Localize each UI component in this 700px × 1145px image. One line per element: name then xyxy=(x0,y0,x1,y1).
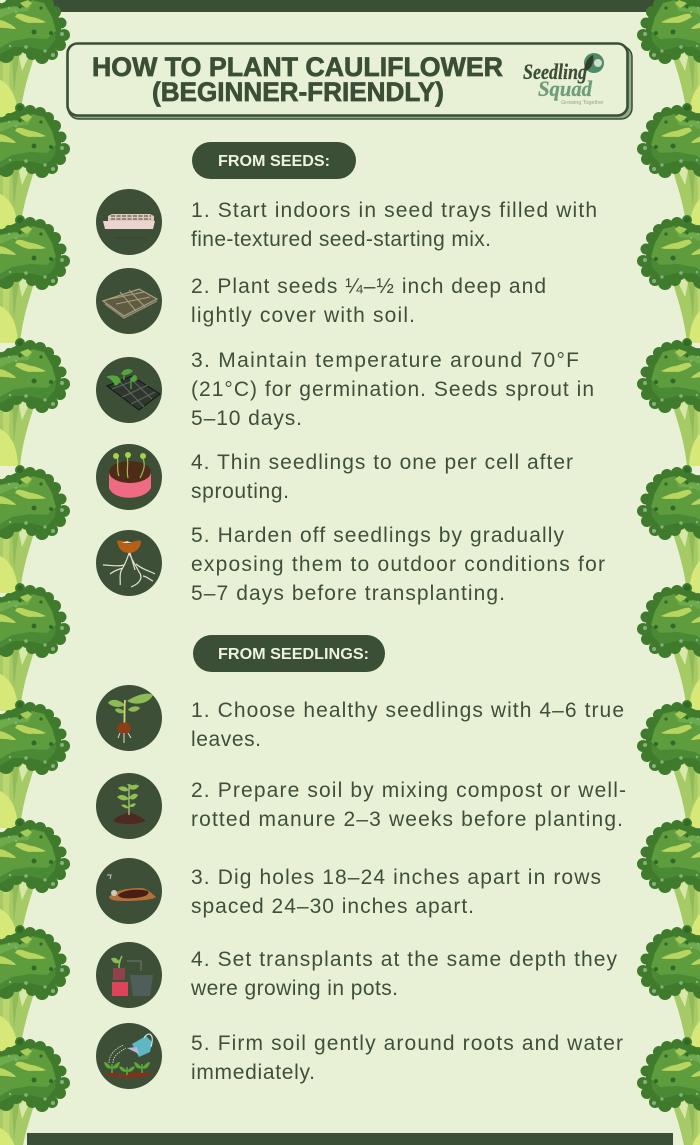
broccoli 2 xyxy=(0,103,70,231)
step: seedlings 5: immediately. xyxy=(191,1061,315,1084)
broccoli 7 xyxy=(0,700,70,828)
broccoli column: right xyxy=(637,0,700,1145)
broccoli 4 xyxy=(637,338,700,466)
step: seeds 4: sprouting. xyxy=(191,480,289,503)
icon: planted tray xyxy=(96,268,162,334)
step: seedlings 5: 5. Firm soil gently around roots and water xyxy=(191,1032,623,1055)
title: HOW TO PLANT CAULIFLOWER xyxy=(92,52,503,82)
step: seedlings 4: 4. Set transplants at the same depth they xyxy=(191,948,618,971)
broccoli 7 xyxy=(637,700,700,828)
step: seeds 1: fine-textured seed-starting mix. xyxy=(191,228,491,251)
step: seedlings 3 xyxy=(191,866,601,918)
step: seeds 3 xyxy=(191,349,594,430)
heading pill: from seedlings xyxy=(193,635,385,672)
broccoli 8 xyxy=(637,818,700,946)
step: seedlings 2: 2. Prepare soil by mixing compost or well- xyxy=(191,779,626,802)
step: seeds 2: 2. Plant seeds ¼–½ inch deep and xyxy=(191,275,546,298)
step: seeds 3: 3. Maintain temperature around 70°F xyxy=(191,349,579,372)
step: seeds 5 xyxy=(191,524,605,605)
icon: watering can xyxy=(96,1023,162,1089)
broccoli 3 xyxy=(637,215,700,343)
step: seedlings 2 xyxy=(191,779,626,831)
step: seedlings 5 xyxy=(191,1032,623,1084)
step: seeds 5: exposing them to outdoor conditions for xyxy=(191,553,605,576)
broccoli 5 xyxy=(637,465,700,593)
step: seeds 1 xyxy=(191,199,597,251)
heading pill: from seedlings: FROM SEEDLINGS: xyxy=(218,646,369,663)
logo: Seedling Squad: Seedling xyxy=(523,59,587,84)
logo: Seedling Squad xyxy=(523,53,604,106)
step: seeds 2 xyxy=(191,275,546,327)
logo: Seedling Squad: Growing Together xyxy=(561,100,604,106)
broccoli 6 xyxy=(637,583,700,711)
broccoli 1 xyxy=(637,0,700,117)
step: seedlings 4: were growing in pots. xyxy=(190,977,398,1000)
title xyxy=(92,52,503,107)
broccoli 5 xyxy=(0,465,70,593)
step: seedlings 2: rotted manure 2–3 weeks before planting. xyxy=(191,808,623,831)
step: seedlings 3: 3. Dig holes 18–24 inches apart in rows xyxy=(191,866,601,889)
top bar xyxy=(30,0,670,12)
step: seeds 5: 5–7 days before transplanting. xyxy=(191,582,505,605)
broccoli 2 xyxy=(637,103,700,231)
title panel xyxy=(68,44,632,119)
icon: sprouted seed roots xyxy=(96,530,162,596)
logo: Seedling Squad: Squad xyxy=(538,76,593,101)
broccoli 4 xyxy=(0,338,70,466)
icon: healthy seedling xyxy=(96,685,162,751)
step: seeds 4 xyxy=(191,451,573,503)
broccoli 10 xyxy=(637,1037,700,1145)
heading pill: from seeds xyxy=(192,142,356,179)
title: (BEGINNER-FRIENDLY) xyxy=(152,77,444,107)
icon: transplant into pot xyxy=(96,942,162,1008)
icon: seedlings in pot xyxy=(96,444,162,510)
broccoli 3 xyxy=(0,215,70,343)
broccoli 8 xyxy=(0,818,70,946)
heading pill: from seeds: FROM SEEDS: xyxy=(218,153,330,170)
broccoli 10 xyxy=(0,1037,70,1145)
step: seeds 5: 5. Harden off seedlings by gradually xyxy=(191,524,564,547)
icon: seedling in soil xyxy=(96,773,162,839)
step: seeds 3: (21°C) for germination. Seeds sprout in xyxy=(191,378,594,401)
step: seedlings 1 xyxy=(191,699,624,751)
bottom bar xyxy=(27,1133,673,1145)
step: seeds 2: lightly cover with soil. xyxy=(191,304,415,327)
icon: seed tray xyxy=(96,189,162,255)
step: seeds 1: 1. Start indoors in seed trays filled with xyxy=(191,199,597,222)
step: seeds 3: 5–10 days. xyxy=(191,407,302,430)
broccoli 9 xyxy=(0,925,70,1053)
step: seedlings 4 xyxy=(190,948,618,1000)
broccoli 6 xyxy=(0,583,70,711)
step: seedlings 3: spaced 24–30 inches apart. xyxy=(191,895,474,918)
step: seeds 4: 4. Thin seedlings to one per cell after xyxy=(191,451,573,474)
broccoli 1 xyxy=(0,0,70,117)
broccoli 9 xyxy=(637,925,700,1053)
icon: sprouting tray xyxy=(96,357,162,423)
step: seedlings 1: 1. Choose healthy seedlings with 4–6 true xyxy=(191,699,624,722)
icon: dug hole xyxy=(96,858,162,924)
step: seedlings 1: leaves. xyxy=(191,728,261,751)
broccoli column: left xyxy=(0,0,70,1145)
